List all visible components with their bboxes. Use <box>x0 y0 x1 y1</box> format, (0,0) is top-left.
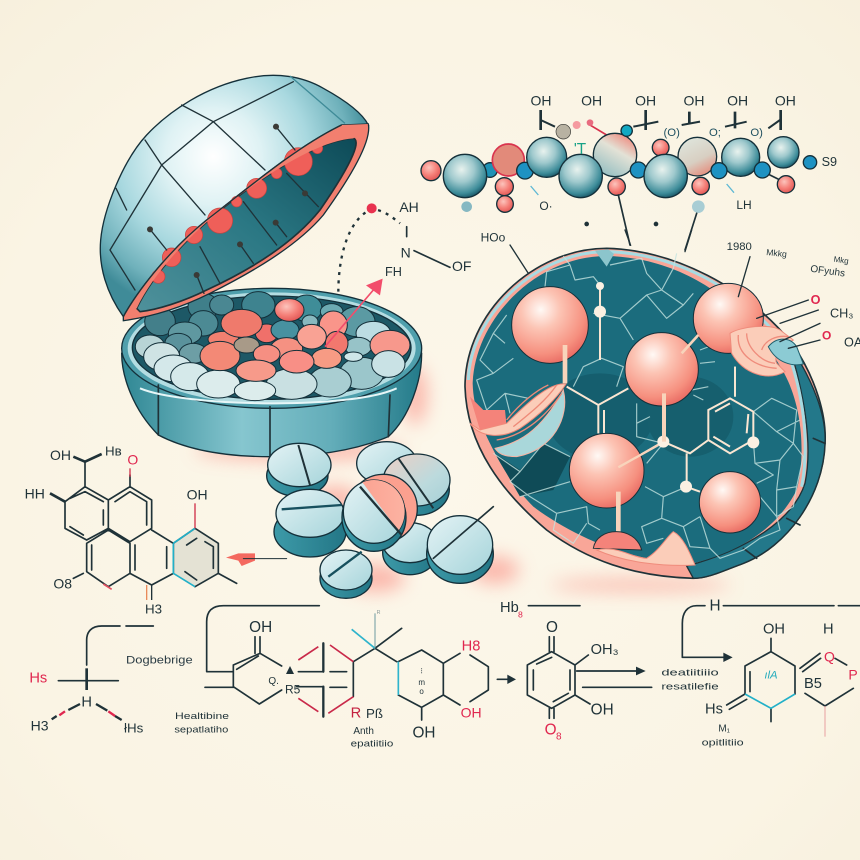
dotted arc and labels: N <box>401 244 411 260</box>
bottom swoosh <box>593 532 695 565</box>
quinone molecule: O <box>545 722 557 739</box>
small branched molecule: Hs <box>29 671 47 687</box>
small labels: sepatlatiho <box>174 724 228 734</box>
cyan ring fill <box>173 528 218 587</box>
tablets pile <box>267 442 493 598</box>
molecular skeleton <box>567 282 759 493</box>
tablet 8 <box>320 550 372 598</box>
fused rings <box>65 462 237 587</box>
red arrow to tablets <box>226 553 287 566</box>
small labels <box>126 655 229 734</box>
top notch <box>595 249 614 267</box>
top right swoosh <box>730 326 803 376</box>
tablet 5 <box>383 523 437 575</box>
chain balls <box>421 119 817 226</box>
top bracket arrow: H <box>709 598 721 615</box>
small labels: Dogbebrige <box>126 655 193 667</box>
tablet 7 <box>427 507 493 583</box>
label: OF: OF <box>452 258 471 274</box>
right ring molecule <box>702 621 858 747</box>
disc labels and leader lines: 1980 <box>727 241 752 253</box>
tablet 3 <box>357 442 417 485</box>
arrow to quinone <box>497 675 516 684</box>
chain bonds and OH labels: OH <box>581 93 602 109</box>
disc labels and leader lines: Mkg <box>833 255 849 266</box>
teal inner disc <box>473 256 802 563</box>
coloured bonds and thick stems <box>50 454 195 600</box>
structure labels: O8 <box>53 576 72 592</box>
dotted arc and labels: FH <box>385 265 402 279</box>
lower right structures <box>470 598 860 747</box>
central bridged molecule <box>205 606 482 749</box>
right side of bridged ring <box>470 655 488 702</box>
right ring molecule: ılA <box>764 669 778 681</box>
disc labels and leader lines: O <box>811 293 821 307</box>
structure labels <box>25 443 208 616</box>
small branched molecule: łHs <box>124 721 144 736</box>
central bridged molecule: OH <box>249 619 272 636</box>
disc labels and leader lines: O <box>822 328 831 342</box>
structure labels: H3 <box>145 601 162 616</box>
chain bonds and OH labels: O) <box>750 127 763 139</box>
reaction labels: resatilefie <box>661 681 719 691</box>
small branched molecule: H3 <box>31 718 49 734</box>
quinone molecule: OH <box>591 702 614 719</box>
small branched molecule <box>29 626 153 736</box>
quinone molecule: 8 <box>556 731 562 742</box>
right ring molecule: Hs <box>705 701 723 717</box>
chain bonds and OH labels <box>531 93 796 180</box>
right ring molecule: Q <box>824 649 835 665</box>
right ring molecule: M₁ <box>718 724 731 735</box>
left swoosh <box>470 384 566 457</box>
central bridged molecule: Q. <box>268 676 279 687</box>
dotted arc and labels: AH <box>399 199 419 215</box>
central bridged molecule: ⁝ <box>420 666 423 675</box>
quinone molecule: Hb <box>500 600 519 616</box>
right ring molecule: OH <box>763 621 785 637</box>
left polycyclic structure <box>25 443 287 616</box>
tablet 2 <box>274 489 346 557</box>
central bridged molecule: R5 <box>285 682 301 696</box>
central bridged molecule: OH <box>461 704 482 720</box>
central bridged molecule: OH <box>412 724 435 741</box>
capsule dome lid <box>100 75 369 321</box>
right ring molecule: opitlitiio <box>702 737 744 747</box>
disc labels and leader lines: OFyuhs <box>810 264 846 280</box>
pink glow shadows <box>195 365 730 592</box>
double reaction arrows <box>577 667 652 687</box>
quinone molecule: O <box>546 619 558 636</box>
small labels: Healtibine <box>175 711 229 721</box>
central bridged molecule: epatiitiio <box>351 739 393 749</box>
lower left structures <box>29 606 482 749</box>
reaction labels: deatiitiiio <box>661 667 719 677</box>
pink spheres <box>512 283 763 533</box>
arrow: pink pointer <box>325 279 383 347</box>
capsule <box>100 75 450 457</box>
structure labels: O <box>127 452 138 468</box>
small branched molecule: H <box>81 695 92 711</box>
disc labels and leader lines <box>481 230 860 350</box>
right ring molecule: B5 <box>804 676 822 692</box>
infographic canvas <box>26 74 860 748</box>
chain small labels and leader lines: LH <box>736 198 752 212</box>
sphere connectors <box>565 335 735 545</box>
disc labels and leader lines: CH₃ <box>830 306 853 320</box>
chain small labels and leader lines <box>531 141 837 250</box>
chain small labels and leader lines: 'T <box>574 141 587 158</box>
big circular cell cross-section <box>465 230 860 578</box>
tablet 4 <box>383 454 450 515</box>
central bridged molecule: Pß <box>366 706 383 721</box>
tablet 1 <box>267 443 331 496</box>
dotted arc and labels <box>338 199 450 292</box>
quinone molecule <box>500 600 619 742</box>
chain bonds and OH labels: OH <box>775 93 796 109</box>
chain small labels and leader lines: S9 <box>822 155 837 169</box>
chain bonds and OH labels: (O) <box>663 127 680 139</box>
central bridged molecule: R <box>377 610 381 616</box>
central bridged molecule: m <box>418 678 425 687</box>
central bridged molecule: o <box>419 687 424 696</box>
right ring molecule: P <box>848 666 858 682</box>
chain bonds and OH labels: OH <box>684 93 704 109</box>
quinone molecule: OH₃ <box>591 642 619 658</box>
central bridged molecule: H8 <box>462 639 480 655</box>
pills inside tray <box>135 292 410 401</box>
disc labels and leader lines: Mkkg <box>766 247 788 259</box>
top bracket arrow <box>682 598 860 662</box>
capsule base tray <box>122 288 422 457</box>
central bridged molecule: R <box>351 705 361 721</box>
chain bonds and OH labels: OH <box>531 93 551 109</box>
chain bonds and OH labels: OH <box>635 93 656 109</box>
right ring molecule: H <box>823 621 834 637</box>
reaction labels <box>661 667 719 691</box>
central bridged molecule: Anth <box>353 726 374 737</box>
structure labels: OH <box>187 486 208 502</box>
quinone molecule: 8 <box>518 609 523 619</box>
chain bonds and OH labels: O; <box>709 127 721 139</box>
outer disc rim <box>465 248 825 578</box>
molecular chain <box>421 93 837 250</box>
chain small labels and leader lines: O· <box>539 199 553 213</box>
disc labels and leader lines: HOo <box>481 231 506 245</box>
structure labels: OH <box>50 447 71 463</box>
structure labels: HH <box>25 486 45 502</box>
tablet 6 pink and blue <box>342 470 420 551</box>
structure labels: Hв <box>105 443 122 458</box>
chain bonds and OH labels: OH <box>727 93 748 109</box>
cell network lines <box>477 253 803 558</box>
